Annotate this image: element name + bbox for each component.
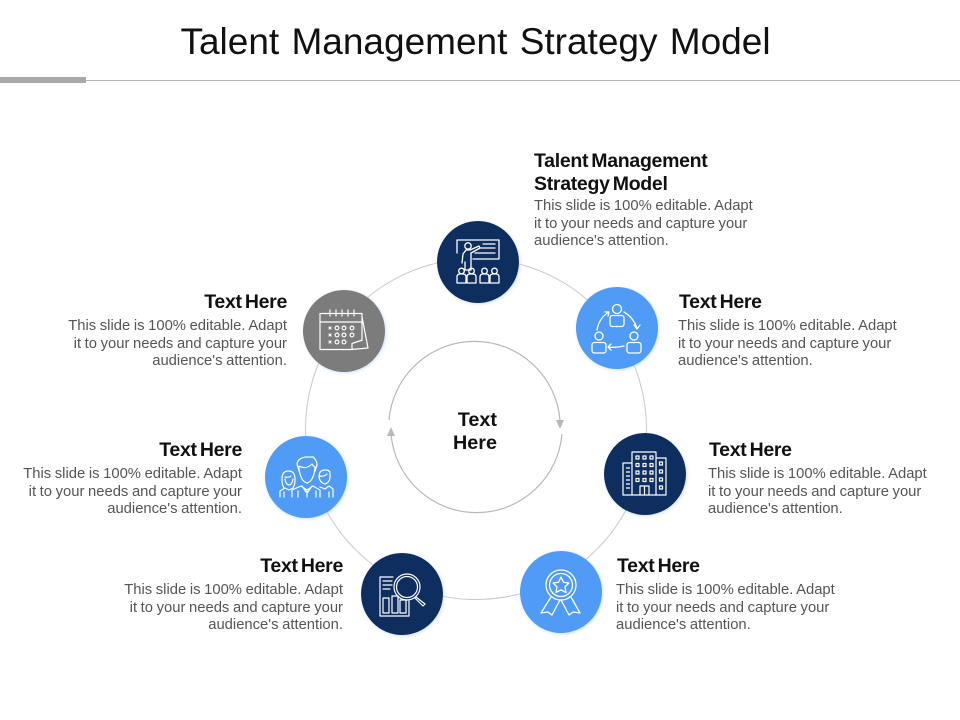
text block: top: Strategy Model [534, 173, 668, 195]
text block: upper right [678, 291, 897, 369]
text block: lower left [124, 555, 343, 633]
text block: right: it to your needs and capture your [708, 484, 921, 500]
text block: top: This slide is 100% editable. Adapt [534, 198, 753, 214]
text block: lower left: audience's attention. [208, 617, 343, 633]
text block: lower right: Text Here [617, 555, 700, 577]
text block: upper left: Text Here [204, 291, 287, 313]
text block: left [23, 439, 242, 517]
node: award ribbon icon [520, 551, 602, 633]
title: Talent Management Strategy Model [180, 21, 771, 62]
center label: Here [453, 432, 497, 454]
text block: top: it to your needs and capture your [534, 216, 747, 232]
text block: right: This slide is 100% editable. Adapt [708, 466, 927, 482]
text block: left: Text Here [159, 439, 242, 461]
text block: left: audience's attention. [107, 501, 242, 517]
text block: upper left: it to your needs and capture your [74, 336, 287, 352]
text block: left: it to your needs and capture your [29, 484, 242, 500]
center label: Text [458, 409, 497, 431]
text block: top [534, 150, 753, 249]
text block: top: audience's attention. [534, 233, 669, 249]
text block: lower right: This slide is 100% editable. Adapt [616, 582, 835, 598]
text block: upper right: audience's attention. [678, 353, 813, 369]
text block: top: Talent Management [534, 150, 708, 172]
text block: left: This slide is 100% editable. Adapt [23, 466, 242, 482]
text block: upper left [68, 291, 287, 369]
node: office building icon [604, 433, 686, 515]
text block: right: audience's attention. [708, 501, 843, 517]
text block: right: Text Here [709, 439, 792, 461]
node: report search icon [361, 553, 443, 635]
title rule [0, 77, 960, 83]
text block: upper right: Text Here [679, 291, 762, 313]
node: calendar icon [303, 290, 385, 372]
text block: lower left: it to your needs and capture your [130, 600, 343, 616]
text block: lower right [616, 555, 835, 633]
text block: lower left: Text Here [260, 555, 343, 577]
node: team cycle icon [576, 287, 658, 369]
text block: upper left: This slide is 100% editable. Adapt [68, 318, 287, 334]
text block: lower right: it to your needs and capture your [616, 600, 829, 616]
text block: right [708, 439, 927, 517]
center label [453, 409, 497, 454]
outer ring [306, 258, 646, 600]
text block: upper right: This slide is 100% editable. Adapt [678, 318, 897, 334]
text block: lower left: This slide is 100% editable. Adapt [124, 582, 343, 598]
inner cycle arrows [387, 341, 564, 513]
text block: upper left: audience's attention. [152, 353, 287, 369]
node: people group icon [265, 436, 347, 518]
text block: upper right: it to your needs and capture your [678, 336, 891, 352]
text block: lower right: audience's attention. [616, 617, 751, 633]
node: presentation icon [437, 221, 519, 303]
